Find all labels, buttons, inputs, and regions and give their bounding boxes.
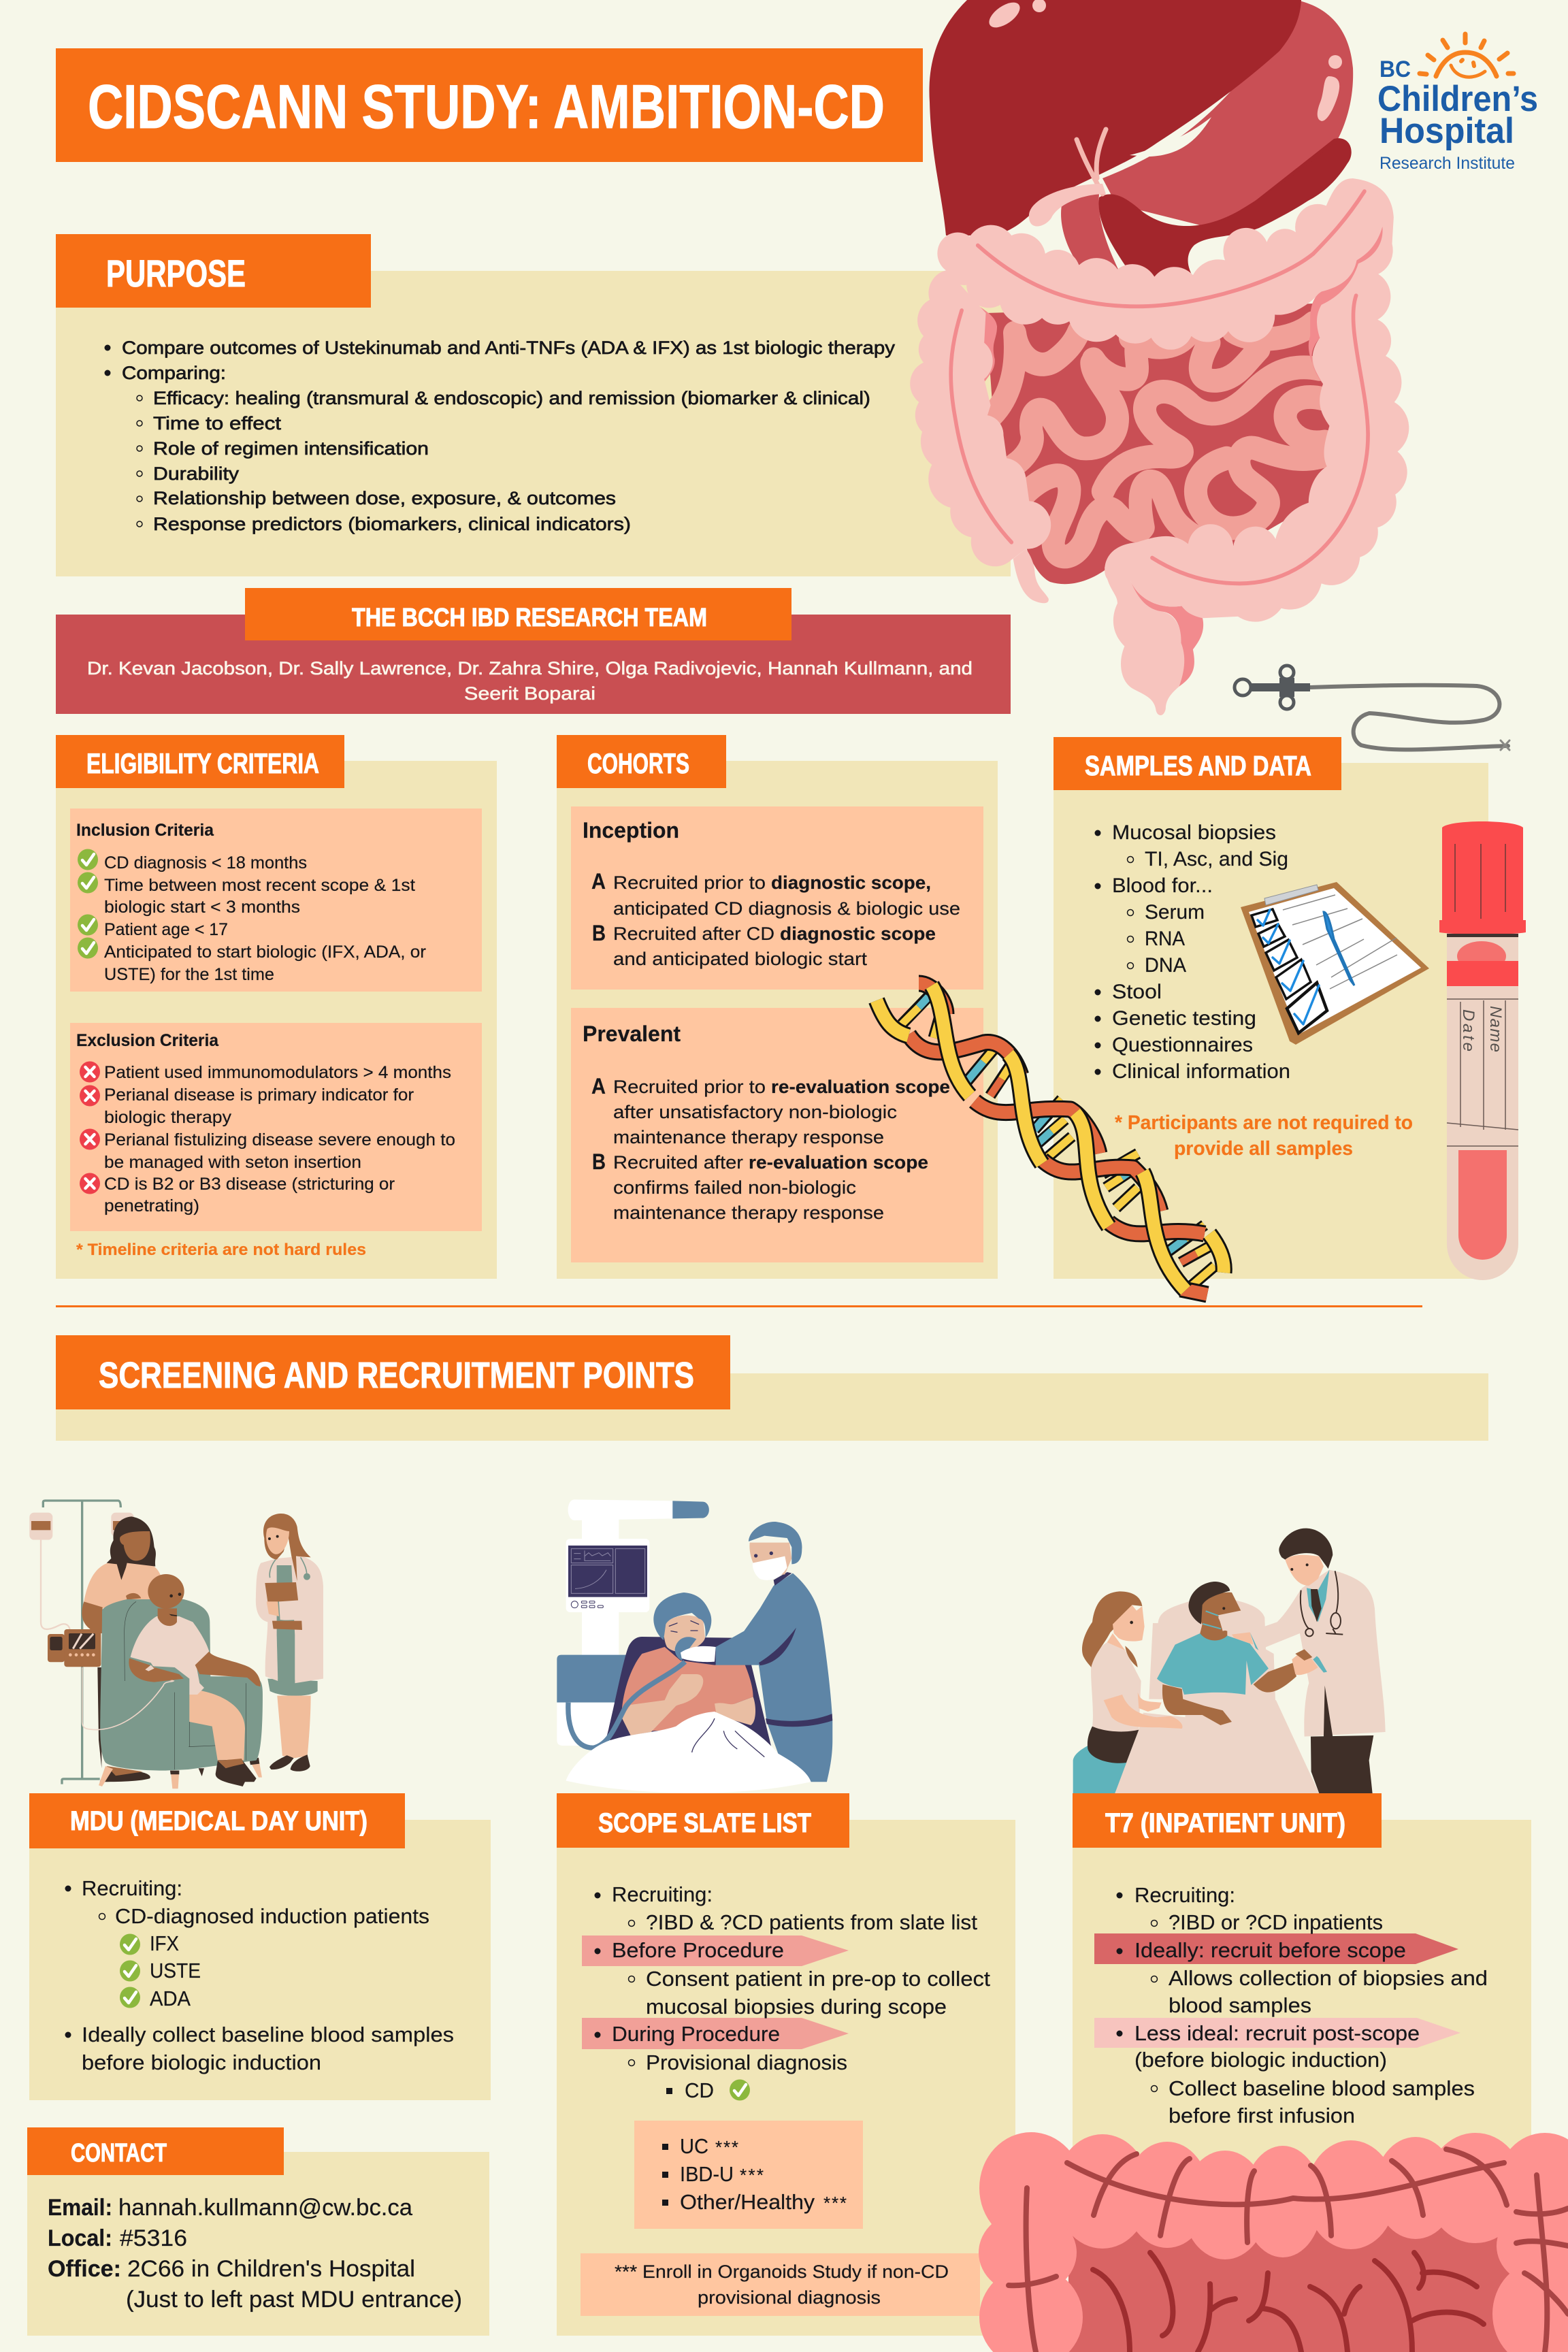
scope list: During Procedure [612,2022,780,2046]
colon bands [1009,2149,1568,2352]
left colon shadow [946,272,997,382]
MDU list: IFX [150,1931,179,1955]
T7 list: before first infusion [1169,2104,1355,2127]
contact heading tab [27,2127,284,2175]
MDU list: before biologic induction [82,2051,321,2074]
purpose bullet list: Response predictors (biomarkers, clinical indicators) [153,514,631,534]
title banner: CIDSCANN STUDY: AMBITION-CD [88,73,885,142]
other diagnoses box: *** [823,2193,847,2213]
logo: BC Children's Hospital Research Institute: Research Institute [1379,154,1515,173]
inception box: A [591,869,606,894]
cohorts heading tab [557,735,726,788]
logo: BC Children's Hospital Research Institute: Children’s [1377,79,1538,119]
exclusion criteria box: be managed with seton insertion [104,1153,361,1172]
cohorts heading tab: COHORTS [587,747,689,779]
team names [87,658,973,704]
prevalent box: Recruited after [613,1152,743,1173]
tube blood [1458,1150,1507,1260]
ceiling arm [568,1499,709,1656]
prevalent box: A [591,1074,606,1098]
purpose bullet list [105,338,896,534]
T7 list: Collect baseline blood samples [1169,2076,1475,2100]
blue machine [557,1655,626,1746]
appendix [1013,549,1049,603]
inclusion criteria box: CD diagnosis < 18 months [104,853,307,872]
team names: Dr. Kevan Jacobson, Dr. Sally Lawrence, Dr. Zahra Shire, Olga Radivojevic, Hannah Kullmann, and [87,658,973,679]
arrow: before procedure [582,1936,849,1966]
samples list: TI, Asc, and Sig [1145,848,1288,870]
scope list: Recruiting: [612,1882,713,1906]
purpose bullet list: Durability [153,463,240,484]
title banner [56,48,923,162]
exclusion criteria box: Perianal disease is primary indicator for [104,1085,414,1105]
samples heading tab: SAMPLES AND DATA [1085,750,1311,781]
exclusion criteria box: Perianal fistulizing disease severe enough to [104,1130,455,1149]
liver [929,0,1301,235]
scope heading tab: SCOPE SLATE LIST [598,1808,811,1838]
panel: MDU [29,1793,491,2100]
mesentery [986,303,1329,584]
MDU list: Recruiting: [82,1876,182,1900]
MDU heading tab [29,1793,405,1848]
panel: eligibility criteria [56,735,497,1279]
eligibility footnote: * Timeline criteria are not hard rules [76,1241,366,1259]
prevalent box: re-evaluation scope [771,1077,950,1097]
samples list: Blood for... [1112,875,1213,897]
contact details: #5316 [120,2225,187,2251]
arrow: ideally before scope [1094,1933,1458,1964]
T7 list: (before biologic induction) [1134,2048,1387,2072]
samples list: Mucosal biopsies [1112,821,1276,844]
inception box: Recruited prior to [613,872,766,893]
panel: contact [27,2127,489,2336]
team heading tab [245,588,791,640]
samples note: * Participants are not required to [1115,1112,1413,1134]
prevalent box: re-evaluation scope [749,1152,928,1173]
T7 list: blood samples [1169,1993,1311,2017]
ascending colon [910,270,1051,566]
prevalent box: Prevalent [583,1022,681,1046]
IV pole [43,1501,120,1784]
bed backrest [1149,1601,1275,1700]
purpose bullet list: Time to effect [153,413,282,434]
small intestine [992,323,1326,557]
other diagnoses box: *** [715,2137,738,2157]
bile duct [1077,129,1106,194]
armchair [99,1599,263,1788]
logo sun [1420,34,1514,77]
inception box: Recruited after CD [613,924,774,944]
icon: blood tube: Name [1486,1006,1505,1052]
inception box: anticipated CD diagnosis & biologic use [613,898,960,919]
highlights [985,0,1342,121]
rectum [1105,567,1186,715]
purpose bullet list: Compare outcomes of Ustekinumab and Anti-TNFs (ADA & IFX) as 1st biologic therapy [122,338,896,358]
blanket [566,1712,811,1793]
MDU heading tab: MDU (MEDICAL DAY UNIT) [70,1806,368,1836]
icon: blood tube [1439,821,1526,1280]
prevalent box: after unsatisfactory non-biologic [613,1102,897,1122]
MDU list: Ideally collect baseline blood samples [82,2023,454,2046]
monitor [566,1539,649,1612]
samples list: DNA [1145,954,1186,977]
inception box: diagnostic scope [780,924,936,944]
scope list: Before Procedure [612,1938,784,1962]
team heading tab: THE BCCH IBD RESEARCH TEAM [352,604,707,632]
inclusion criteria box: Inclusion Criteria [76,821,214,840]
arrow: less ideal post scope [1094,2018,1460,2048]
inclusion criteria box: Anticipated to start biologic (IFX, ADA, or [104,943,426,962]
MDU list [65,1876,454,2074]
contact details: Local: [48,2225,112,2251]
tube red band [1447,961,1518,986]
inner abdomen [1068,2212,1518,2352]
DNA orange strands [909,983,1207,1294]
contact details: 2C66 in Children's Hospital [127,2256,415,2282]
illustration: inpatient unit [1073,1529,1386,1793]
prevalent box: maintenance therapy response [613,1127,884,1147]
purpose bullet list: Comparing: [122,363,226,383]
prevalent box: maintenance therapy response [613,1203,884,1223]
standing doctor [256,1514,323,1771]
logo: BC Children's Hospital Research Institute: BC [1379,56,1411,82]
MDU list: USTE [150,1959,201,1982]
samples list: Genetic testing [1112,1007,1256,1030]
right colon shadow [1309,227,1383,384]
samples list: Clinical information [1112,1060,1290,1083]
exclusion criteria box: penetrating) [104,1196,199,1215]
prevalent box: confirms failed non-biologic [613,1177,856,1198]
bed sheet [1115,1693,1319,1793]
inception box: and anticipated biologic start [613,949,868,969]
scope heading tab [557,1793,849,1848]
panel: cohorts [557,735,998,1279]
inclusion criteria box [70,808,482,992]
patient [1157,1582,1296,1725]
other diagnoses box: UC [680,2134,708,2158]
panel: research team [56,588,1011,714]
rectum shadow [1130,581,1203,687]
T7 list: ?IBD or ?CD inpatients [1169,1910,1383,1934]
cream gap [1130,117,1211,157]
oxygen tube [568,1662,685,1748]
stomach [1102,0,1353,228]
mesentery vessels [1093,2253,1484,2352]
colon lobes [979,2132,1568,2352]
panel: T7 inpatient unit [1073,1793,1531,2336]
other diagnoses box: IBD-U [680,2162,734,2186]
icon: blood tube: Date [1459,1009,1477,1051]
infusion pump [48,1629,101,1667]
MDU list: CD-diagnosed induction patients [115,1904,429,1928]
transverse and descending colon [937,178,1409,622]
tube liquid top [1457,941,1506,971]
contact details: hannah.kullmann@cw.bc.ca [118,2195,412,2221]
panel: scope slate list [557,1793,1015,2336]
scope list: ?IBD & ?CD patients from slate list [646,1910,977,1934]
T7 list: Less ideal: recruit post-scope [1134,2021,1420,2045]
illustration: large intestine detail [979,2132,1568,2352]
samples note: provide all samples [1174,1138,1353,1160]
colon centre lines [951,191,1368,583]
stool [1073,1746,1128,1793]
inclusion criteria box: USTE) for the 1st time [104,965,274,984]
purpose bullet list: Efficacy: healing (transmural & endoscopic) and remission (biomarker & clinical) [153,388,870,408]
contact details [48,2195,462,2313]
exclusion criteria box: CD is B2 or B3 disease (stricturing or [104,1175,395,1194]
icon: DNA helix [877,983,1224,1294]
intestines traced [910,178,1409,715]
tube cap [1439,821,1526,934]
other diagnoses box: Other/Healthy [680,2190,815,2214]
inception box: B [592,921,606,945]
team names: Seerit Boparai [464,683,595,704]
prevalent box [571,1008,983,1262]
seated woman [1082,1591,1182,1763]
stomach rim [1225,138,1352,225]
T7 list: Recruiting: [1134,1883,1235,1907]
patient [621,1592,755,1735]
arrow: during procedure [582,2018,849,2049]
surgeon [681,1522,832,1782]
samples list: RNA [1145,928,1185,950]
scope list: CD [685,2078,714,2102]
purpose bullet list: Relationship between dose, exposure, & outcomes [153,488,616,508]
logo: BC Children's Hospital Research Institute: Hospital [1379,111,1514,151]
doctor [1232,1529,1386,1793]
contact heading tab: CONTACT [71,2139,167,2168]
T7 heading tab [1073,1793,1382,1848]
chair back [606,1637,771,1747]
eligibility heading tab [56,735,344,788]
inception box: Inception [583,818,679,843]
inclusion criteria box: biologic start < 3 months [104,898,300,917]
contact details: (Just to left past MDU entrance) [126,2287,462,2313]
inclusion criteria box: Patient age < 17 [104,920,228,939]
scope list: mucosal biopsies during scope [646,1995,947,2019]
samples list: Serum [1145,901,1205,924]
other diagnoses box: *** [740,2165,764,2185]
panel: samples and data [1054,737,1488,1279]
samples heading tab [1054,737,1341,790]
prevalent box: B [592,1149,606,1174]
illustration: MDU infusion [29,1501,323,1788]
organoids note: provisional diagnosis [698,2287,881,2308]
section: screening and recruitment points: SCREENING AND RECRUITMENT POINTS [99,1355,694,1396]
icon: endoscope [1235,666,1509,750]
scope list: Consent patient in pre-op to collect [646,1967,990,1991]
scope list [595,1882,990,2102]
purpose heading tab: PURPOSE [106,252,246,295]
scope list: Provisional diagnosis [646,2051,847,2074]
DNA yellow strands [877,985,1224,1290]
purpose bullet list: Role of regimen intensification [153,438,429,459]
T7 list: Allows collection of biopsies and [1169,1966,1488,1990]
eligibility heading tab: ELIGIBILITY CRITERIA [86,747,319,779]
prevalent box: Recruited prior to [613,1077,766,1097]
icon: clipboard [1241,882,1429,1045]
T7 list: Ideally: recruit before scope [1134,1938,1406,1962]
inception box: diagnostic scope, [771,872,931,893]
illustration: scope procedure [557,1499,832,1793]
samples list: Questionnaires [1112,1034,1253,1056]
stomach lower lobe [1061,192,1123,279]
other diagnoses box [634,2121,863,2229]
organoids note: *** Enroll in Organoids Study if non-CD [615,2261,949,2282]
T7 heading tab: T7 (INPATIENT UNIT) [1105,1808,1345,1838]
purpose heading tab [56,234,371,308]
IV bags [29,1513,134,1630]
inclusion criteria box: Time between most recent scope & 1st [104,876,415,895]
MDU list: ADA [150,1987,191,2010]
inception box [571,806,983,990]
exclusion criteria box: Exclusion Criteria [76,1031,219,1050]
exclusion criteria box [70,1023,482,1231]
exclusion criteria box: Patient used immunomodulators > 4 months [104,1063,451,1082]
section: screening and recruitment points [56,1335,1488,1441]
standing woman [82,1516,161,1782]
contact details: Email: [48,2195,112,2221]
samples list [1094,821,1290,1083]
contact details: Office: [48,2256,121,2282]
exclusion criteria box: biologic therapy [104,1108,232,1127]
illustration: digestive system [910,0,1409,715]
logo: BC Children's Hospital Research Institute [1377,34,1538,173]
seated patient [129,1574,261,1786]
samples note [1115,1112,1413,1160]
samples list: Stool [1112,981,1162,1003]
panel: purpose [56,234,1011,576]
DNA rungs [902,987,1215,1286]
T7 list [1116,1883,1488,2127]
organoids note [581,2253,980,2316]
